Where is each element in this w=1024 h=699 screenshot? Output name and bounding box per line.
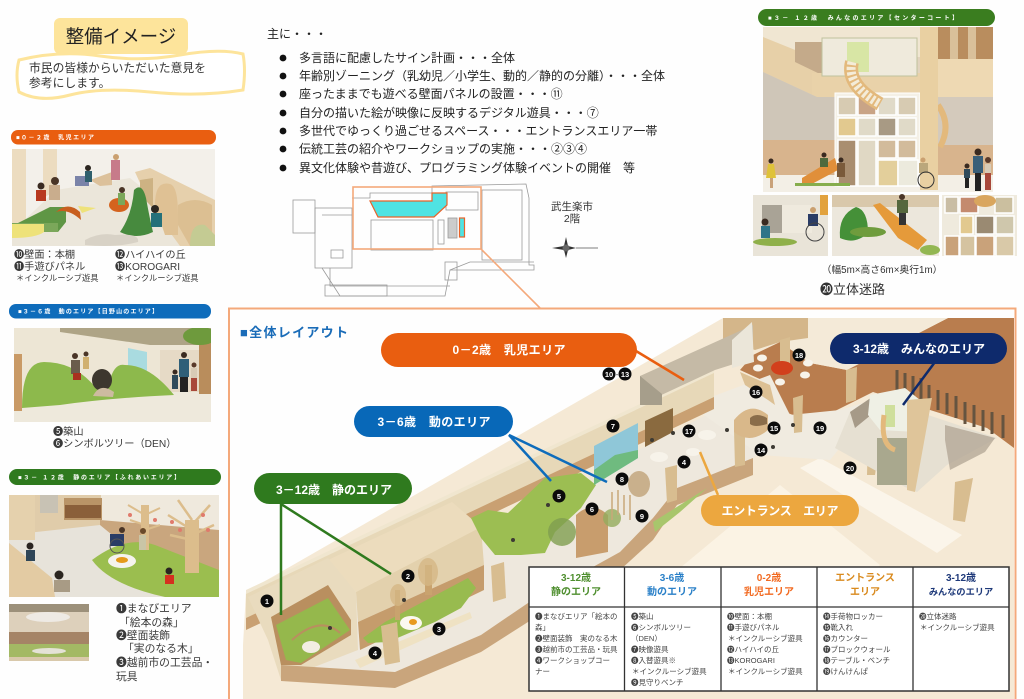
panel: 3-6 active area [9,304,217,450]
map number markers: 15 [770,424,778,433]
caption: items 10-13 [14,248,199,283]
column: entrance: エリア [850,586,880,598]
pill: entrance area: エントランス エリア [722,504,838,518]
heading bar: 0-2 [11,130,216,144]
text block: main points: 年齢別ゾーニング（乳幼児／小学生、動的／静的の分離）・・・全体 [299,68,665,83]
column: 3-12 quiet: 3-12歳 [561,571,591,584]
pill: everyone area [830,333,1007,364]
caption: items 5-6: ❺築山 [53,425,84,438]
column: entrance [823,572,895,676]
caption: items 1-3: 玩具 [116,670,138,683]
column: entrance: エントランス [835,572,895,584]
column: 3-6 active: ❽入替遊具※ [631,655,676,665]
callout: citizen opinions [17,51,244,98]
column: everyone: みんなのエリア [929,587,993,597]
text block: main points: 異文化体験や昔遊び、プログラミング体験イベントの開催 等 [299,160,635,175]
column: 3-6 active: 3-6歳 [660,571,684,584]
map number markers: 13 [621,370,629,379]
map number markers: 1 [265,597,269,606]
map number markers: 6 [590,505,594,514]
map number markers: 19 [816,424,824,433]
pill: 3-6 active area [354,406,513,437]
pill: everyone area: 3-12歳 みんなのエリア [853,342,985,356]
map number markers: 17 [685,427,693,436]
pill: 0-2 infant area [381,333,637,367]
column: 0-2 infant: 0-2歳 [757,571,781,584]
heading bar: 3-12 quiet: ■３－ １２歳 静のエリア【ふれあいエリア】 [18,474,180,482]
column: 3-12 quiet: ナー [535,667,550,676]
panel: center court [753,9,1017,297]
column: 0-2 infant: ⓬ハイハイの丘 [727,645,780,654]
panel: overall layout [229,249,1016,699]
panel: 0-2 infant area [11,130,216,283]
column: 0-2 infant: ❿壁面：本棚 [727,611,772,621]
map: isometric floor plan [243,318,1014,699]
column: 3-6 active: （DEN） [631,634,662,643]
map number markers: 16 [752,388,760,397]
map number markers: 7 [611,422,615,431]
image: maze detail 3 [942,195,1017,256]
text block: main points [267,27,665,175]
heading bar: 0-2: ■０－２歳 乳児エリア [16,134,94,142]
column: 3-6 active: ＊インクルーシブ遊具 [632,666,707,676]
caption: items 5-6: ❻シンボルツリー（DEN） [53,438,176,450]
pill: entrance area [701,495,859,526]
pill: 3-12 quiet area [254,473,412,504]
image: infant area rendering [12,149,215,246]
text block: main points: 伝統工芸の紹介やワークショップの実施・・・②③④ [299,142,587,156]
column: 0-2 infant: ⓭KOROGARI [727,656,775,665]
map number markers: 4 [682,458,687,467]
column: 3-12 quiet: ❶まなびエリア「絵本の [535,611,618,621]
column: everyone: ⓴立体迷路 [919,611,957,621]
pill: 3-6 active area: 3－6歳 動のエリア [378,414,490,429]
caption: items 10-13: ＊インクルーシブ遊具 [116,273,199,283]
map number markers: 8 [620,475,624,484]
column: entrance: ⓲テーブル・ベンチ [823,655,890,665]
image: maze detail 2 [832,194,940,256]
map number markers: 5 [557,492,561,501]
caption: maze size: （幅5m×高さ6m×奥行1m） [822,263,942,276]
map number markers: - [616,372,619,379]
column: entrance: ⓱ブロックウォール [823,644,891,654]
caption: items 5-6 [53,425,176,450]
map number markers: 9 [640,512,644,521]
map number markers: 4 [373,649,378,658]
frame [229,308,1016,699]
column: 3-12 quiet: ❷壁面装飾 実のなる木 [535,633,618,643]
icon: compass [552,237,598,258]
column: 3-12 quiet: 静のエリア [551,585,601,598]
caption: items 1-3 [116,602,213,683]
column: 0-2 infant [727,571,803,676]
heading bar: 3-6: ■３－６歳 動のエリア【日野山のエリア】 [18,308,158,316]
label: 武生楽市 2階 [551,200,593,225]
column: entrance: ⓳けんけんぱ [823,667,868,676]
table: area legend [529,567,1009,691]
column: entrance: ⓰カウンター [823,634,868,643]
heading bar: center court: ■３－ １２歳 みんなのエリア【センターコート】 [768,14,958,22]
column: 3-12 quiet [535,571,618,676]
image: book forest rendering [9,604,89,661]
column: 3-6 active: ❾見守りベンチ [631,678,684,687]
map number markers: 2 [406,572,410,581]
column: 3-6 active: 動のエリア [647,585,697,598]
callout: citizen opinions: 参考にします。 [29,76,110,90]
caption: items 10-13: ⓭KOROGARI [115,261,180,273]
caption: item 20: ⓴立体迷路 [820,282,885,297]
column: everyone: ＊インクルーシブ遊具 [920,622,995,632]
label: 武生楽市 2階: 武生楽市 [551,200,593,213]
column: everyone [919,571,995,632]
map number markers: 10 [605,370,613,379]
image: quiet area rendering [9,495,219,597]
image: main maze rendering [763,27,993,192]
column: 3-12 quiet: 森」 [535,622,550,632]
column: 3-12 quiet: ❸越前市の工芸品・玩具 [535,644,618,654]
floor plan [293,184,534,296]
leader lines [281,351,935,615]
column: 3-6 active [631,571,707,687]
column: 3-6 active: ❼映像遊具 [631,644,669,654]
pill: 3-12 quiet area: 3－12歳 静のエリア [276,482,392,497]
panel: 3-12 quiet area [9,469,221,683]
map number markers: 14 [757,446,766,455]
caption: items 1-3: 「実のなる木」 [123,642,199,655]
text block: main points: 多言語に配慮したサイン計画・・・全体 [299,50,515,65]
caption: items 10-13: ❿壁面：本棚 [14,248,75,261]
callout: citizen opinions: 市民の皆様からいただいた意見を [29,61,206,75]
map number markers: 3 [437,625,441,634]
title: 整備イメージ [54,18,188,54]
column: 3-6 active: ❺築山 [631,611,654,621]
map number markers [260,348,856,660]
column: 0-2 infant: ⓫手遊びパネル [727,622,780,632]
heading bar: 3-6 [9,304,211,318]
caption: items 10-13: ＊インクルーシブ遊具 [16,273,99,283]
column: entrance: ⓮手荷物ロッカー [823,611,883,621]
column: 0-2 infant: 乳児エリア [744,585,794,598]
map number markers: 18 [795,351,803,360]
caption: items 10-13: ⓬ハイハイの丘 [115,249,186,261]
heading: 全体レイアウト: ■全体レイアウト [240,325,348,340]
caption: items 1-3: 「絵本の森」 [119,615,184,629]
text block: main points: 自分の描いた絵が映像に反映するデジタル遊具・・・⑦ [299,105,599,120]
column: 0-2 infant: ＊インクルーシブ遊具 [728,666,803,676]
zoom frame [353,187,481,249]
image: maze detail 1 [753,195,828,256]
column: 0-2 infant: ＊インクルーシブ遊具 [728,633,803,643]
map number markers: 20 [846,464,854,473]
column: 3-12 quiet: ❹ワークショップコー [535,656,610,665]
highlighted area: cyan [370,193,464,237]
heading bar: center court [758,9,995,26]
title: 整備イメージ: 整備イメージ [66,26,176,47]
text block: main points: 多世代でゆっくり過ごせるスペース・・・エントランスエリア一帯 [299,123,657,138]
image: hill and tunnel rendering [14,327,217,422]
caption: items 1-3: ❷壁面装飾 [116,629,170,642]
column: 3-6 active: ❻シンボルツリー [631,623,691,632]
column: entrance: ⓯靴入れ [823,622,853,632]
text block: main points: 主に・・・ [267,27,327,41]
text block: main points: 座ったままでも遊べる壁面パネルの設置・・・⑪ [299,87,563,101]
caption: items 1-3: ❸越前市の工芸品・ [116,655,213,669]
pill: 0-2 infant area: 0－2歳 乳児エリア [452,342,566,357]
caption: items 1-3: ❶まなびエリア [116,602,192,615]
caption: items 10-13: ⓫手遊びパネル [14,260,85,273]
heading bar: 3-12 quiet [9,469,221,485]
leader from plan [481,249,540,308]
label: 武生楽市 2階: 2階 [564,213,581,225]
column: everyone: 3-12歳 [946,571,976,584]
